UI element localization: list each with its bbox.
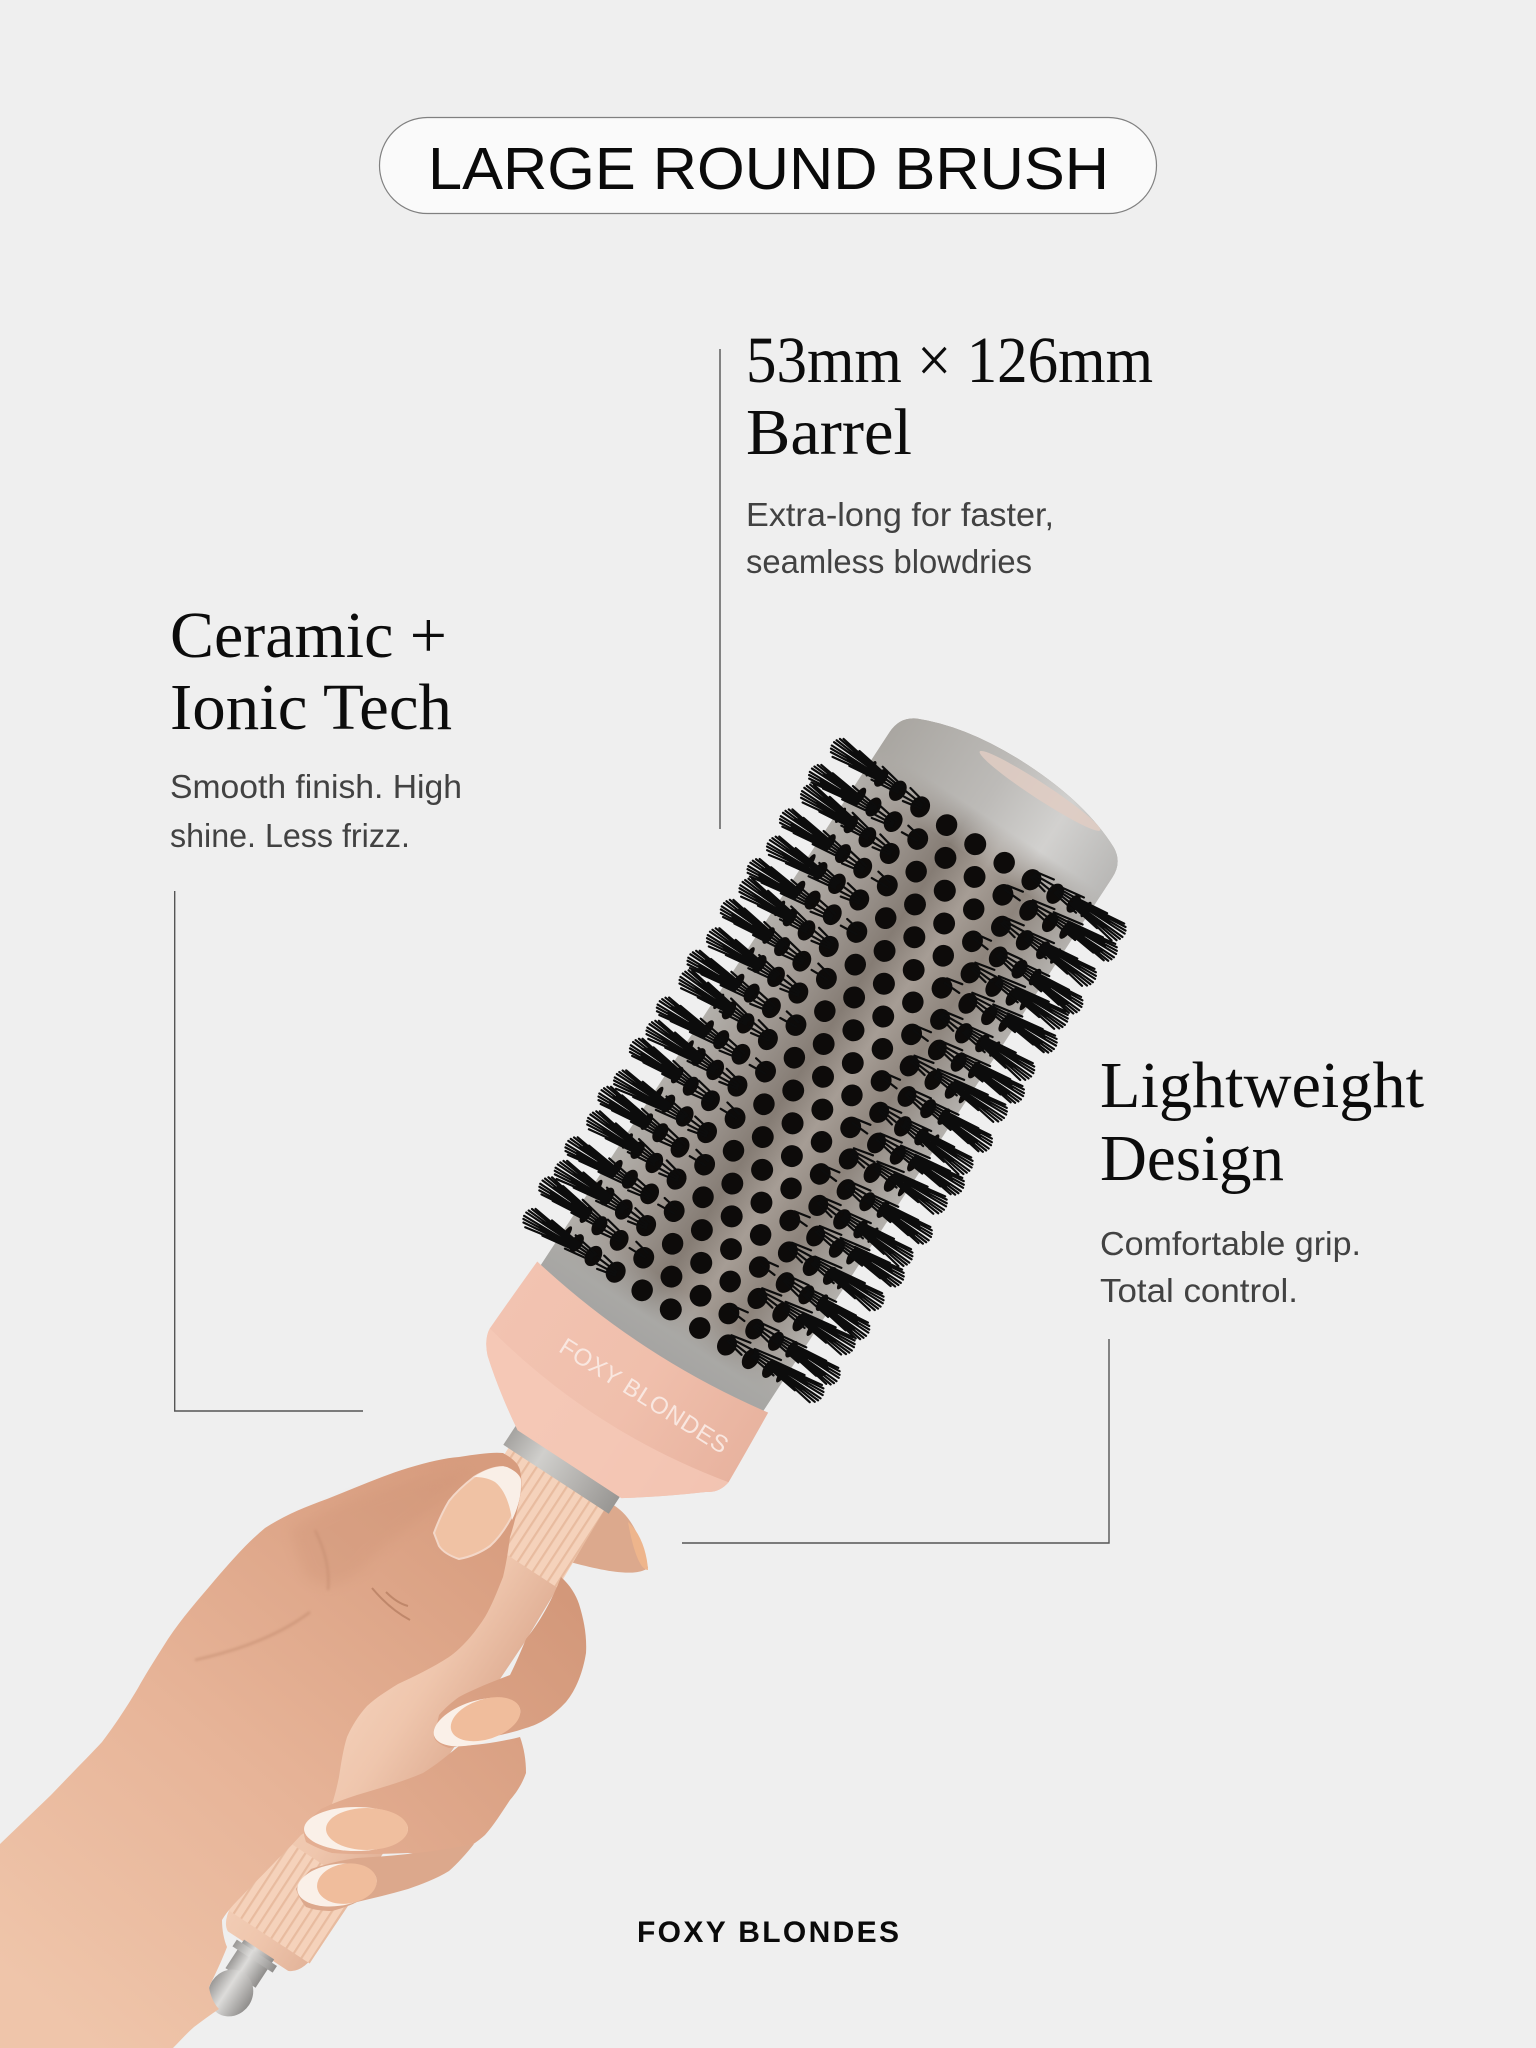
callout: barrel size: 53mm × 126mm: [746, 324, 1153, 397]
callout: ceramic ionic tech: Ionic Tech: [170, 671, 452, 744]
thumbnail: [434, 1467, 521, 1559]
callout: barrel size: Extra-long for faster,: [746, 496, 1054, 533]
callout: barrel size: seamless blowdries: [746, 543, 1032, 580]
ceramic barrel: [534, 692, 1139, 1422]
ring fingernail: [304, 1807, 408, 1851]
round brush: [63, 667, 1176, 2048]
handle top ribs: [459, 1443, 610, 1588]
peach collar: [452, 1260, 772, 1543]
bristles: [516, 732, 1134, 1416]
callout leader: ceramic: [175, 891, 363, 1411]
callout leader: lightweight: [682, 1339, 1109, 1543]
collar brand text: FOXY BLONDES: [554, 1333, 733, 1459]
handle bottom ribs: [223, 1831, 359, 1963]
brand footer: FOXY BLONDES: [637, 1916, 899, 1949]
callout: lightweight design: Comfortable grip.: [1100, 1225, 1361, 1262]
middle finger: [434, 1577, 586, 1748]
index finger behind handle: [560, 1500, 648, 1573]
barrel base: [534, 1217, 795, 1422]
knuckle shading: [290, 1470, 470, 1585]
little fingernail: [294, 1859, 380, 1911]
callout: lightweight design: [1100, 1049, 1424, 1309]
metal end nub: [197, 1936, 279, 2026]
callout: ceramic ionic tech: shine. Less frizz.: [170, 817, 410, 854]
callout leader: barrel: [719, 349, 721, 829]
callout: lightweight design: Lightweight: [1100, 1049, 1424, 1122]
hand: [0, 1453, 586, 2048]
little finger: [296, 1844, 474, 1911]
title pill: [380, 118, 1156, 214]
barrel tip: [872, 718, 1118, 908]
callout: barrel size: Barrel: [746, 396, 912, 469]
ring finger: [304, 1737, 526, 1854]
barrel holes: [555, 760, 1093, 1391]
callout: ceramic ionic tech: Smooth finish. High: [170, 768, 462, 805]
callout: lightweight design: Design: [1100, 1122, 1284, 1195]
thumb crease shadow: [195, 1530, 328, 1660]
palm and thumb: [0, 1453, 522, 2048]
handle: [203, 1441, 613, 1981]
title pill: LARGE ROUND BRUSH: [428, 136, 1109, 202]
metal ring: [503, 1421, 624, 1514]
thumb joint wrinkle: [372, 1588, 410, 1620]
callout: ceramic ionic tech: [170, 599, 462, 854]
callout: lightweight design: Total control.: [1100, 1272, 1298, 1309]
callout: barrel size: [746, 324, 1153, 580]
callout: ceramic ionic tech: Ceramic +: [170, 599, 447, 672]
middle fingernail: [428, 1688, 526, 1756]
